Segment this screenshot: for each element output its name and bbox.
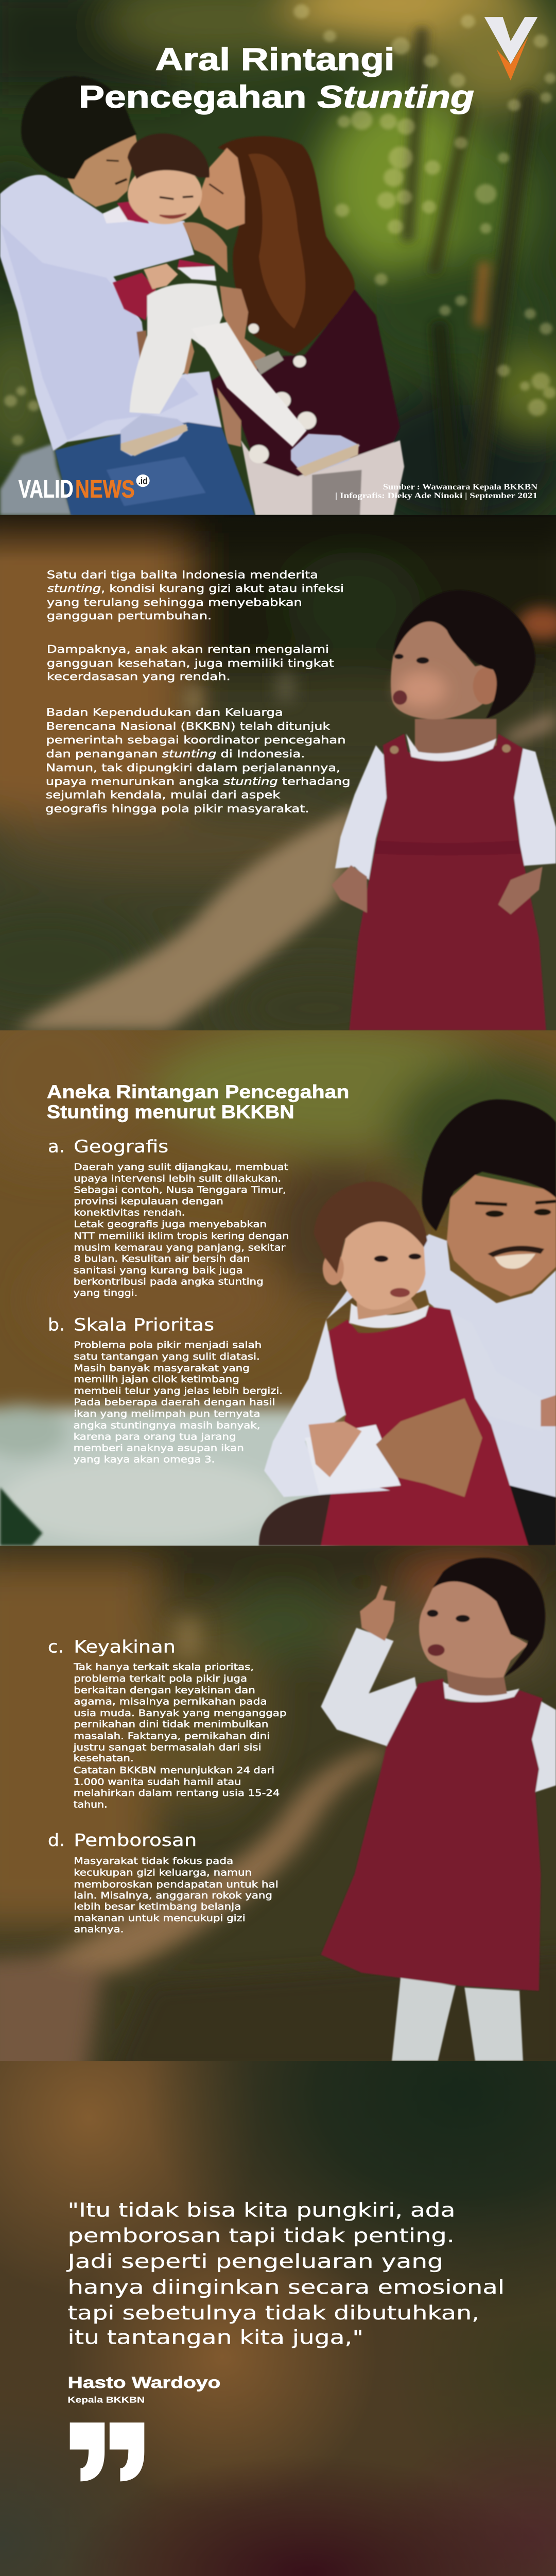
item c: Keyakinan: masalah. Faktanya, pernikahan dini xyxy=(74,1731,270,1741)
icon: foliage xyxy=(0,1487,43,1546)
intro text: sejumlah kendala, mulai dari aspek xyxy=(46,789,281,802)
quote text: hanya diinginkan secara emosional xyxy=(68,2277,505,2299)
item a: Geografis: Letak geografis juga menyebabkan xyxy=(74,1219,267,1230)
intro text: kecerdasasan yang rendah. xyxy=(47,671,231,683)
item c: Keyakinan: problema terkait pola pikir juga xyxy=(74,1674,247,1684)
item b: Skala Prioritas: b. xyxy=(48,1315,65,1335)
forest background xyxy=(0,0,556,515)
intro text: geografis hingga pola pikir masyarakat. xyxy=(45,803,309,815)
item b: Skala Prioritas: memberi anaknya asupan ikan xyxy=(74,1443,244,1453)
item b: Skala Prioritas: memilih jajan cilok ketimbang xyxy=(74,1375,239,1385)
item a: Geografis xyxy=(48,1137,289,1298)
item d: Pemborosan: lebih besar ketimbang belanja xyxy=(74,1902,241,1912)
item b: Skala Prioritas: Masih banyak masyarakat yang xyxy=(74,1363,250,1374)
title: Pencegahan Stunting xyxy=(79,79,474,115)
quote text: itu tantangan kita juga," xyxy=(68,2327,363,2349)
panel: cover photo xyxy=(0,0,556,515)
woman xyxy=(197,136,404,515)
item b: Skala Prioritas: satu tantangan yang sulit diatasi. xyxy=(74,1352,260,1362)
intro text: Badan Kependudukan dan Keluarga xyxy=(46,706,283,719)
item a: Geografis: provinsi kepulauan dengan xyxy=(74,1196,223,1207)
title xyxy=(79,41,474,115)
intro text: Dampaknya, anak akan rentan mengalami xyxy=(47,643,329,656)
icon: closing quotation mark xyxy=(70,2422,144,2481)
title: Aral Rintangi xyxy=(155,41,395,77)
item a: Geografis: yang tinggi. xyxy=(74,1288,137,1298)
intro text: pemerintah sebagai koordinator pencegahan xyxy=(46,734,346,747)
item a: Geografis: sanitasi yang kurang baik juga xyxy=(74,1265,243,1276)
heading: Stunting menurut BKKBN xyxy=(47,1101,294,1122)
item c: Keyakinan: Catatan BKKBN menunjukkan 24 dari xyxy=(74,1766,274,1776)
item a: Geografis: NTT memiliki iklim tropis kering dengan xyxy=(74,1231,289,1242)
quote text: Jadi seperti pengeluaran yang xyxy=(66,2250,443,2273)
item b: Skala Prioritas: karena para orang tua jarang xyxy=(74,1432,236,1442)
item c: Keyakinan: kesehatan. xyxy=(74,1753,134,1764)
panel: quote xyxy=(0,2061,556,2576)
intro text: gangguan kesehatan, juga memiliki tingkat xyxy=(47,657,334,670)
quote text: tapi sebetulnya tidak dibutuhkan, xyxy=(68,2302,479,2325)
item a: Geografis: 8 bulan. Kesulitan air bersih dan xyxy=(74,1254,250,1264)
item d: Pemborosan: anaknya. xyxy=(74,1924,124,1935)
item c: Keyakinan xyxy=(48,1637,287,1810)
item c: Keyakinan: 1.000 wanita sudah hamil atau xyxy=(74,1777,241,1787)
heading: Aneka Rintangan Pencegahan xyxy=(47,1081,349,1102)
panel: intro xyxy=(0,515,556,1030)
intro text: yang terulang sehingga menyebabkan xyxy=(47,597,302,609)
item d: Pemborosan: memboroskan pendapatan untuk hal xyxy=(74,1879,279,1890)
item a: Geografis: konektivitas rendah. xyxy=(74,1208,185,1218)
item c: Keyakinan: c. xyxy=(48,1637,64,1657)
quote text: "Itu tidak bisa kita pungkiri, ada xyxy=(68,2199,455,2222)
heading xyxy=(47,1081,349,1122)
item c: Keyakinan: usia muda. Banyak yang menganggap xyxy=(74,1708,287,1719)
item d: Pemborosan xyxy=(48,1831,279,1935)
intro text xyxy=(45,569,351,815)
Validnews logo: VALID xyxy=(19,475,74,503)
child in red dress xyxy=(332,590,556,1030)
source credit xyxy=(335,482,537,500)
intro text: gangguan pertumbuhan. xyxy=(47,610,212,622)
Validnews logo xyxy=(19,474,150,503)
baby xyxy=(103,133,360,477)
item b: Skala Prioritas xyxy=(48,1315,283,1465)
item d: Pemborosan: lain. Misalnya, anggaran rokok yang xyxy=(74,1891,272,1901)
item b: Skala Prioritas: angka stuntingnya masih banyak, xyxy=(74,1420,260,1431)
icon: V logo xyxy=(484,17,537,80)
item b: Skala Prioritas: Pada beberapa daerah dengan hasil xyxy=(74,1397,275,1408)
intro text: dan penanganan stunting di Indonesia. xyxy=(46,748,305,760)
item a: Geografis: berkontribusi pada angka stunting xyxy=(74,1277,264,1287)
item a: Geografis: musim kemarau yang panjang, sekitar xyxy=(74,1243,286,1253)
item d: Pemborosan: d. xyxy=(48,1831,65,1851)
source credit: | Infografis: Dieky Ade Ninoki | September 2021 xyxy=(335,490,537,500)
item c: Keyakinan: agama, misalnya pernikahan pada xyxy=(74,1697,267,1707)
item c: Keyakinan: Tak hanya terkait skala prioritas, xyxy=(73,1662,254,1673)
panel: obstacles c and d xyxy=(0,1546,556,2481)
panel: obstacles a and b xyxy=(0,1030,556,1546)
blurred water background xyxy=(0,1030,556,1546)
intro text: Namun, tak dipungkiri dalam perjalanannya, xyxy=(46,762,340,774)
Validnews logo: .id xyxy=(138,476,148,486)
item b: Skala Prioritas: ikan yang melimpah pun ternyata xyxy=(74,1409,260,1419)
item d: Pemborosan: Masyarakat tidak fokus pada xyxy=(74,1856,233,1867)
speaker name: Kepala BKKBN xyxy=(68,2395,145,2404)
speaker name xyxy=(68,2374,220,2404)
item b: Skala Prioritas: yang kaya akan omega 3. xyxy=(74,1454,215,1465)
item d: Pemborosan: Pemborosan xyxy=(74,1831,197,1851)
intro text: stunting , kondisi kurang gizi akut atau infeksi xyxy=(47,583,344,595)
item c: Keyakinan: Keyakinan xyxy=(74,1637,176,1657)
item a: Geografis: a. xyxy=(48,1137,65,1157)
item d: Pemborosan: makanan untuk mencukupi gizi xyxy=(74,1913,246,1924)
item b: Skala Prioritas: Problema pola pikir menjadi salah xyxy=(74,1340,262,1351)
item b: Skala Prioritas: Skala Prioritas xyxy=(74,1315,214,1335)
item b: Skala Prioritas: membeli telur yang jelas lebih bergizi. xyxy=(74,1386,283,1396)
item d: Pemborosan: kecukupan gizi keluarga, namun xyxy=(74,1868,252,1878)
item c: Keyakinan: justru sangat bermasalah dari sisi xyxy=(73,1742,262,1753)
item c: Keyakinan: tahun. xyxy=(74,1800,108,1810)
intro text: Berencana Nasional (BKKBN) telah ditunjuk xyxy=(46,720,331,733)
railing xyxy=(0,444,73,515)
speaker name: Hasto Wardoyo xyxy=(68,2374,220,2392)
man and child xyxy=(259,1099,556,1546)
quote text: pemborosan tapi tidak penting. xyxy=(68,2225,455,2247)
blurred path background xyxy=(0,1546,556,2061)
item c: Keyakinan: melahirkan dalam rentang usia 15-24 xyxy=(74,1788,280,1799)
item a: Geografis: Sebagai contoh, Nusa Tenggara Timur, xyxy=(74,1185,286,1195)
item a: Geografis: upaya intervensi lebih sulit dilakukan. xyxy=(74,1174,281,1184)
man xyxy=(0,76,255,515)
item c: Keyakinan: berkaitan dengan keyakinan dan xyxy=(74,1685,255,1696)
Validnews logo: NEWS xyxy=(75,475,135,503)
item a: Geografis: Daerah yang sulit dijangkau, membuat xyxy=(74,1162,288,1173)
item c: Keyakinan: pernikahan dini tidak menimbulkan xyxy=(74,1719,268,1730)
child pointing up xyxy=(321,1558,556,2061)
quote text xyxy=(66,2199,505,2349)
source credit: Sumber : Wawancara Kepala BKKBN xyxy=(383,482,537,492)
intro text: Satu dari tiga balita Indonesia menderita xyxy=(47,569,318,581)
item a: Geografis: Geografis xyxy=(74,1137,168,1157)
blurred path background xyxy=(0,515,556,1030)
intro text: upaya menurunkan angka stunting terhadang xyxy=(46,775,351,788)
